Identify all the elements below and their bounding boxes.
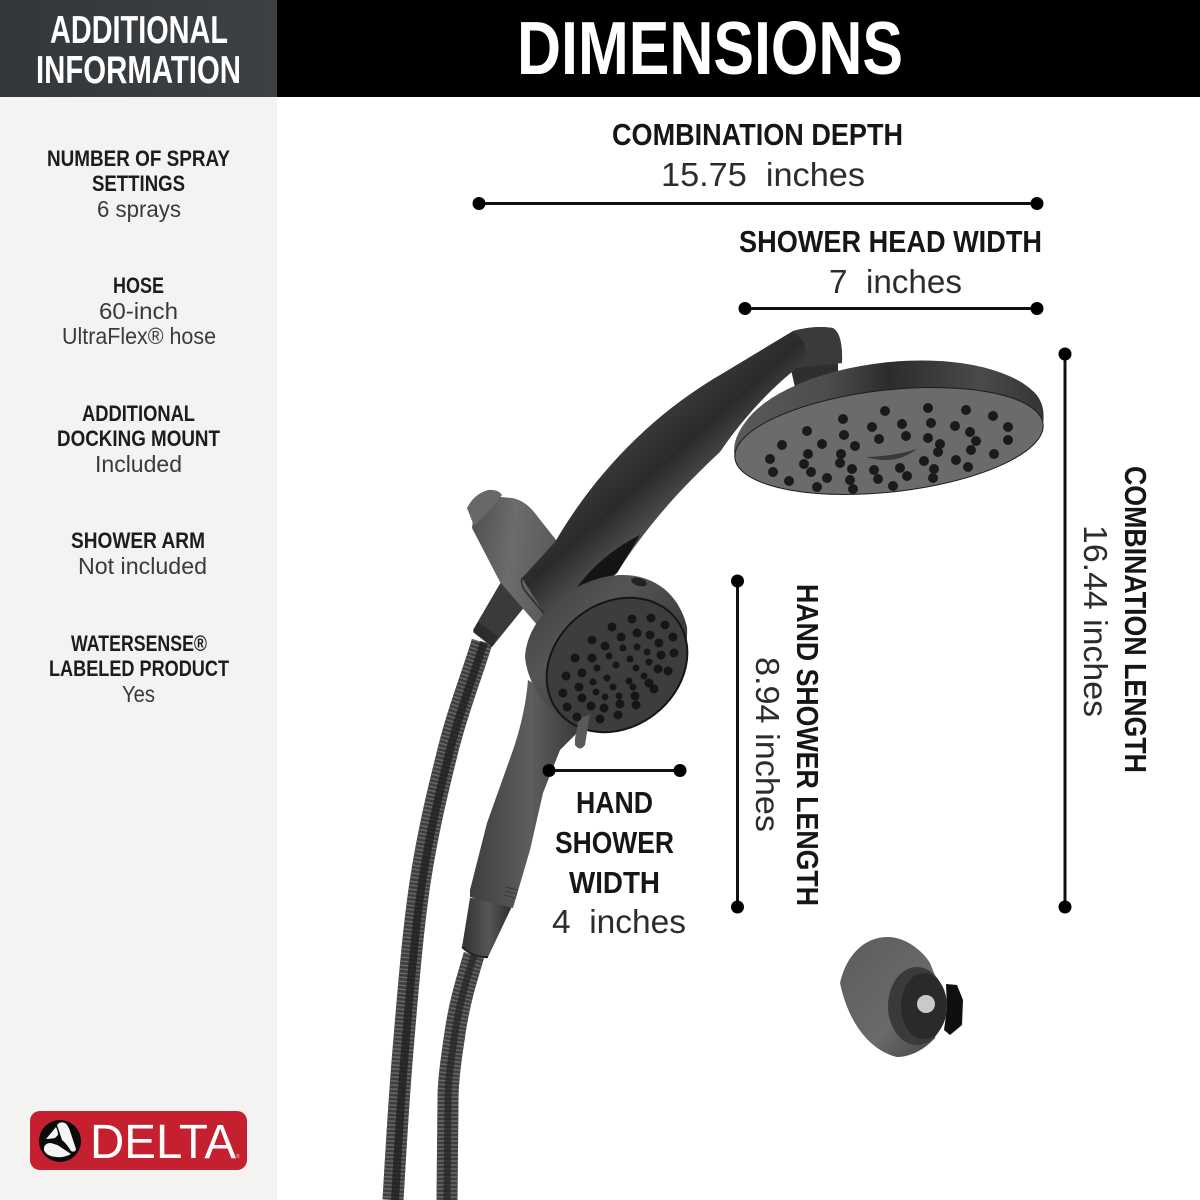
dimension: hand shower width: HAND <box>576 785 653 820</box>
spec: number of spray settings: SETTINGS <box>92 171 185 196</box>
spec: number of spray settings <box>47 146 230 222</box>
sidebar heading <box>36 9 241 92</box>
dimension: hand shower length: HAND SHOWER LENGTH <box>790 584 825 906</box>
product: hose to mount <box>393 642 484 1200</box>
product: rain shower head <box>729 361 1049 509</box>
spec: shower arm: Not included <box>78 553 207 579</box>
spec: watersense <box>49 631 229 707</box>
logo: Delta <box>30 1111 247 1170</box>
spec: additional docking mount: ADDITIONAL <box>82 401 195 426</box>
spec: hose: HOSE <box>113 273 164 298</box>
product: mount bracket <box>467 490 560 647</box>
spec: additional docking mount <box>57 401 220 477</box>
spec: additional docking mount: Included <box>95 451 182 477</box>
dimension: shower head width <box>738 224 1044 315</box>
dimension: hand shower width: SHOWER <box>555 825 674 860</box>
product: curved arm <box>522 327 842 626</box>
dimension: combination depth <box>472 117 1044 210</box>
spec: hose <box>62 273 216 349</box>
dimension: combination depth: COMBINATION DEPTH <box>612 117 903 152</box>
dimension: hand shower length <box>731 574 825 914</box>
dimension: combination length: 16.44 inches <box>1077 525 1114 717</box>
spec: hose: 60-inch <box>99 298 178 324</box>
spec: number of spray settings: 6 sprays <box>97 196 181 222</box>
product: hand shower head <box>520 570 714 760</box>
spec: watersense: WATERSENSE® <box>71 631 207 656</box>
product: hand shower handle <box>462 680 592 957</box>
dimension: shower head width: SHOWER HEAD WIDTH <box>739 224 1042 259</box>
dimension: hand shower width <box>542 764 686 940</box>
product: hose to hand shower <box>447 955 474 1200</box>
sidebar heading: ADDITIONAL <box>50 9 228 52</box>
product: docking mount <box>840 937 963 1057</box>
dimension: hand shower width: WIDTH <box>569 865 660 900</box>
product: neck behind rain head <box>790 358 838 392</box>
header band <box>0 0 1200 97</box>
dimension: combination length: COMBINATION LENGTH <box>1118 466 1153 773</box>
spec: additional docking mount: DOCKING MOUNT <box>57 426 220 451</box>
sidebar heading: INFORMATION <box>36 49 241 92</box>
spray nozzles: hand shower <box>558 614 678 724</box>
left sidebar background <box>0 97 277 1200</box>
spec: watersense: LABELED PRODUCT <box>49 656 229 681</box>
logo: Delta: ® <box>236 1153 240 1160</box>
spec: watersense: Yes <box>122 681 155 707</box>
dimension: shower head width: 7 inches <box>829 263 962 300</box>
dimension: hand shower length: 8.94 inches <box>749 657 786 832</box>
dimension: combination length <box>1058 348 1153 914</box>
dimension: combination depth: 15.75 inches <box>661 156 865 193</box>
dimension: hand shower width: 4 inches <box>552 903 686 940</box>
title: DIMENSIONS <box>517 6 903 90</box>
spec: number of spray settings: NUMBER OF SPRAY <box>47 146 230 171</box>
spec: shower arm <box>71 528 207 579</box>
spec: hose: UltraFlex® hose <box>62 323 216 349</box>
spec: shower arm: SHOWER ARM <box>71 528 205 553</box>
logo: Delta: DELTA <box>90 1116 236 1169</box>
spray nozzles: rain head <box>765 403 1013 494</box>
